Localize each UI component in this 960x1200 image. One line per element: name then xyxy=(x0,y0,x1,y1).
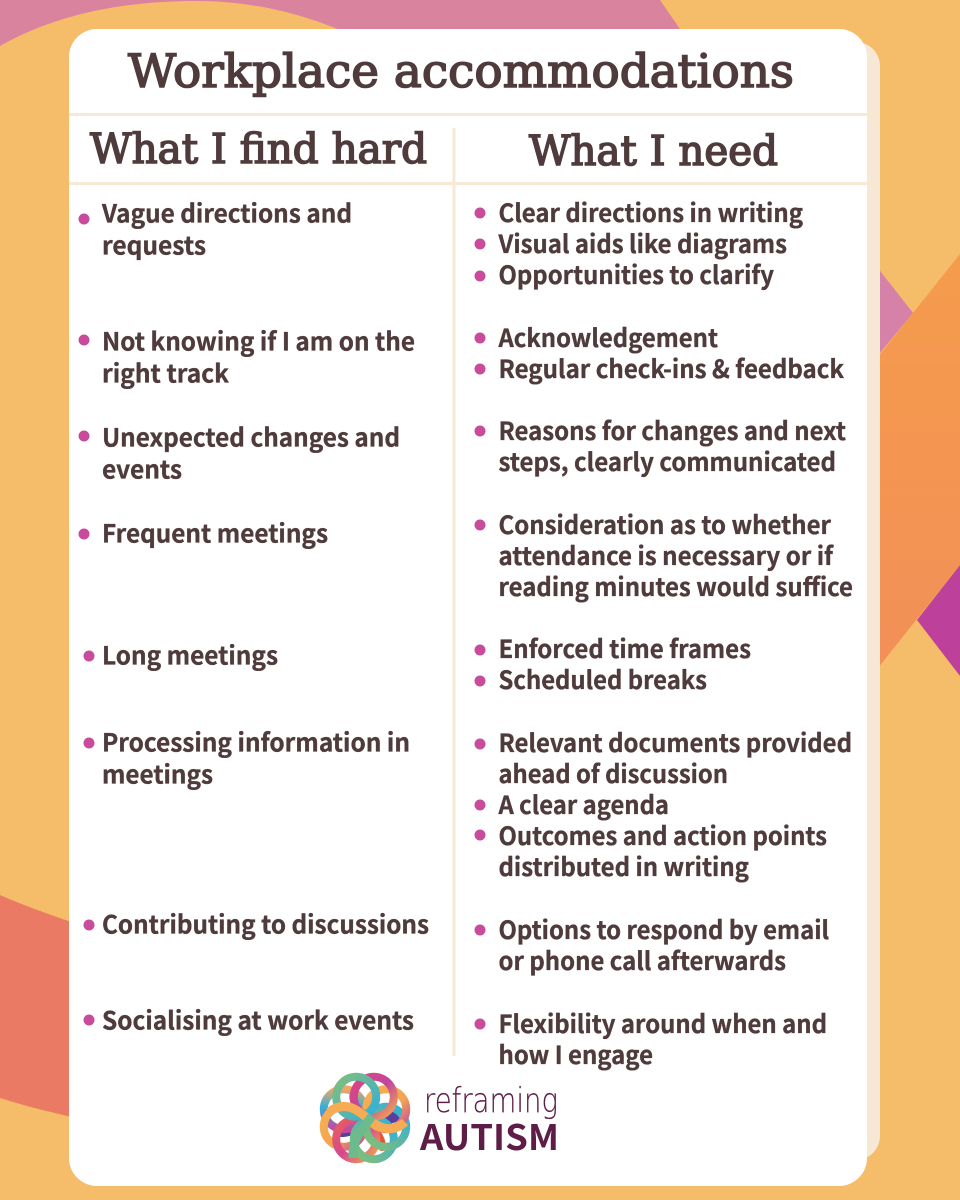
need: flexibility xyxy=(474,1005,827,1072)
hard: unexpected changes: Unexpected changes and xyxy=(102,418,400,454)
hard: not knowing xyxy=(78,322,415,390)
card shadow xyxy=(100,42,880,1160)
background: coral left shape xyxy=(0,895,80,1119)
need: clear agenda: A clear agenda xyxy=(498,786,669,822)
background: orange right shape xyxy=(870,254,960,678)
need: relevant documents xyxy=(474,724,852,791)
hard: not knowing: Not knowing if I am on the xyxy=(102,322,415,358)
need: clear directions: Clear directions in writing xyxy=(498,194,803,230)
need: flexibility: how I engage xyxy=(498,1036,653,1072)
need: reasons: steps, clearly communicated xyxy=(498,443,836,479)
table dividers xyxy=(69,113,867,1056)
heading: what I find hard: What I find hard xyxy=(90,125,427,173)
need: relevant documents: Relevant documents provided xyxy=(498,724,852,760)
hard: not knowing: right track xyxy=(102,354,229,390)
left column list xyxy=(78,194,429,1038)
hard: processing information xyxy=(84,724,410,792)
right column list xyxy=(474,194,853,1072)
need: visual aids: Visual aids like diagrams xyxy=(498,225,787,261)
need: reasons xyxy=(474,412,846,479)
need: acknowledgement: Acknowledgement xyxy=(498,319,718,355)
wordmark: reframing: reframing xyxy=(424,1081,558,1121)
need: outcomes: distributed in writing xyxy=(498,848,749,884)
need: reasons: Reasons for changes and next xyxy=(498,412,846,448)
hard: unexpected changes xyxy=(78,418,400,486)
need: flexibility: Flexibility around when and xyxy=(498,1005,827,1041)
logo: reframing autism xyxy=(324,1077,559,1161)
need: outcomes xyxy=(474,817,827,884)
need: consideration: reading minutes would suffice xyxy=(498,568,853,604)
need: consideration: Consideration as to whether xyxy=(498,506,831,542)
hard: socialising: Socialising at work events xyxy=(102,1002,414,1038)
hard: unexpected changes: events xyxy=(102,450,182,486)
title: Workplace accommodations xyxy=(128,44,794,98)
need: check-ins: Regular check-ins & feedback xyxy=(498,350,844,386)
hard: vague directions: requests xyxy=(102,226,206,262)
need: options to respond: Options to respond by email xyxy=(498,911,829,947)
need: consideration xyxy=(474,506,853,604)
need: opportunities: Opportunities to clarify xyxy=(498,256,775,292)
need: outcomes: Outcomes and action points xyxy=(498,817,827,853)
heading: what I need: What I need xyxy=(529,127,778,175)
background: pink top shape xyxy=(0,0,700,58)
hard: long meetings: Long meetings xyxy=(102,636,278,672)
need: consideration: attendance is necessary or if xyxy=(498,537,835,573)
need: scheduled breaks: Scheduled breaks xyxy=(498,661,707,697)
icon: interwoven rings xyxy=(324,1077,406,1159)
wordmark: AUTISM: AUTISM xyxy=(419,1110,559,1161)
need: options to respond xyxy=(474,911,829,978)
hard: vague directions: Vague directions and xyxy=(101,194,352,230)
need: relevant documents: ahead of discussion xyxy=(498,755,728,791)
hard: processing information: meetings xyxy=(102,756,213,792)
hard: processing information: Processing information in xyxy=(102,724,410,760)
need: options to respond: or phone call afterwards xyxy=(498,942,786,978)
background: magenta right shape xyxy=(917,565,960,676)
hard: contributing: Contributing to discussions xyxy=(102,906,429,942)
background: pink right triangle xyxy=(870,258,913,365)
need: enforced time frames: Enforced time frames xyxy=(498,630,751,666)
hard: vague directions xyxy=(78,194,352,262)
hard: frequent meetings: Frequent meetings xyxy=(102,514,328,550)
